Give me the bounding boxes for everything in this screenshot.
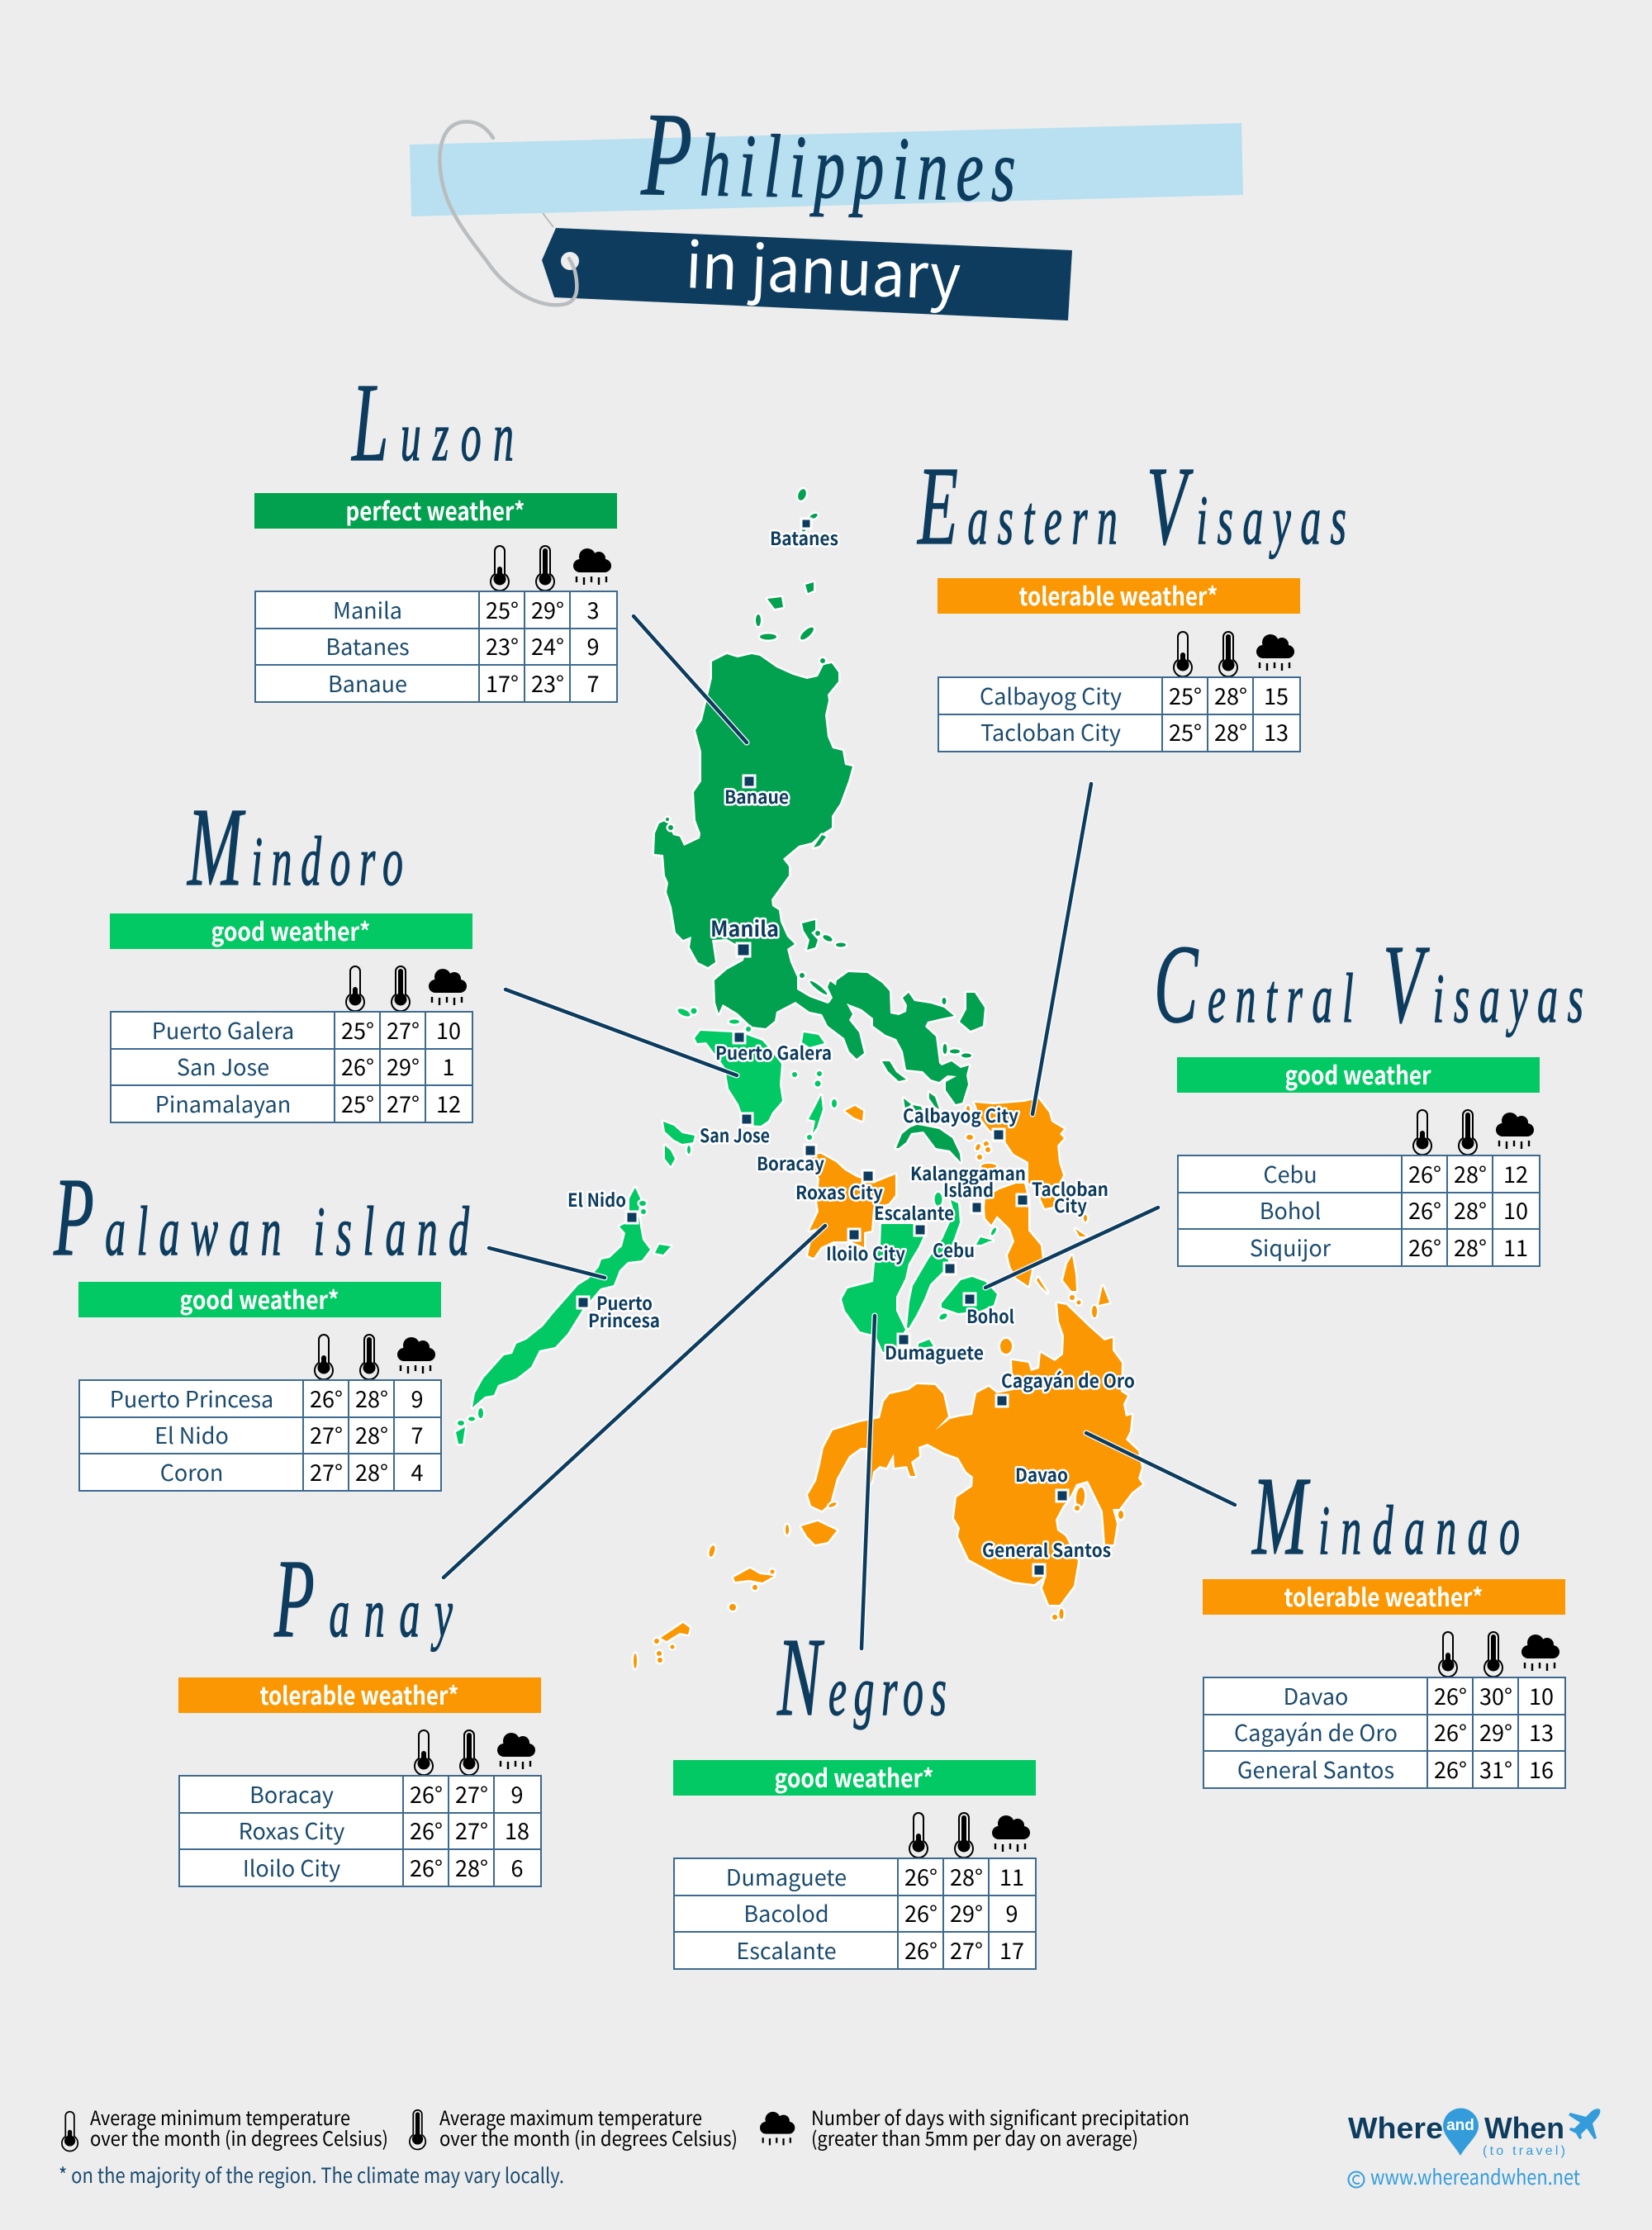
- weather table: 26°: [410, 1777, 443, 1810]
- map city labels: Davao: [1015, 1461, 1068, 1487]
- panel: Mindanao: [1203, 1455, 1565, 1788]
- weather bar: good weather*: [211, 912, 370, 948]
- weather table: Puerto Princesa: [110, 1382, 273, 1414]
- weather table: 28°: [950, 1860, 983, 1892]
- weather table: 25°: [1169, 679, 1202, 711]
- weather table: Coron: [160, 1455, 223, 1487]
- legend text: precipitation: Number of days with significant precipitation: [811, 2102, 1189, 2131]
- heading: Luzon: L uzon: [351, 362, 514, 485]
- weather table: Iloilo City: [243, 1851, 340, 1883]
- weather table: Dumaguete: [726, 1860, 847, 1892]
- map city labels: Iloilo City: [826, 1240, 905, 1266]
- weather bar: tolerable weather*: [259, 1676, 459, 1712]
- weather table: 27°: [455, 1814, 488, 1846]
- leader line: Mindanao: [1086, 1433, 1235, 1505]
- weather table: 23°: [531, 667, 564, 699]
- map city labels: Kalanggaman: [910, 1160, 1026, 1186]
- map city labels: Puerto: [596, 1289, 653, 1316]
- map city labels: Manila: [710, 913, 779, 943]
- map city labels: Puerto Galera: [715, 1039, 832, 1065]
- weather table: 26°: [341, 1050, 374, 1082]
- leader line: Eastern Visayas: [1032, 784, 1091, 1114]
- logo word: When: When: [1484, 2111, 1564, 2145]
- legend text: minimum temperature: Average minimum temperature: [90, 2102, 350, 2131]
- map city labels: Boracay: [757, 1150, 824, 1176]
- weather table: 26°: [1408, 1231, 1441, 1263]
- region: Eastern Visayas: [966, 1098, 1064, 1293]
- panel: Panay: [178, 1538, 541, 1886]
- weather table: 28°: [355, 1382, 388, 1414]
- weather table: Banaue: [328, 667, 407, 699]
- weather table: 26°: [1434, 1679, 1467, 1711]
- weather table: 11: [1503, 1231, 1528, 1263]
- weather bar: good weather: [1285, 1056, 1431, 1092]
- weather table: [111, 1012, 472, 1122]
- weather table: 26°: [410, 1851, 443, 1883]
- region: Panay: [808, 1106, 895, 1258]
- weather table: 27°: [310, 1418, 343, 1450]
- map city labels: Batanes: [770, 524, 838, 551]
- legend text: precipitation: (greater than 5mm per day on average): [811, 2123, 1138, 2152]
- weather table: Tacloban City: [980, 715, 1121, 747]
- weather table: 10: [436, 1013, 461, 1046]
- weather table: 27°: [950, 1933, 983, 1966]
- weather table: 29°: [1479, 1715, 1512, 1748]
- weather table: 25°: [341, 1013, 374, 1046]
- map city labels: Calbayog City: [903, 1102, 1018, 1128]
- weather table: [938, 677, 1300, 752]
- weather table: Roxas City: [239, 1814, 344, 1846]
- leader line: Luzon: [634, 616, 747, 743]
- column icons: [491, 546, 611, 591]
- weather table: 3: [586, 593, 600, 625]
- logo word: and: and: [1446, 2117, 1474, 2134]
- weather table: General Santos: [1237, 1753, 1394, 1785]
- icon: minimum temperature: [62, 2112, 78, 2151]
- legend: [62, 2102, 1189, 2152]
- weather table: Cagayán de Oro: [1234, 1715, 1398, 1748]
- weather table: 25°: [486, 593, 519, 625]
- weather table: El Nido: [154, 1418, 229, 1450]
- weather bar: good weather*: [775, 1758, 933, 1795]
- logo tagline: (to travel): [1483, 2144, 1565, 2158]
- weather bar: good weather*: [180, 1280, 339, 1317]
- weather table: San Jose: [177, 1050, 269, 1082]
- weather table: 28°: [1454, 1231, 1487, 1263]
- map city labels: Cagayán de Oro: [1001, 1367, 1135, 1393]
- weather bar: [1177, 1056, 1540, 1093]
- panel: Luzon: [254, 362, 617, 702]
- weather table: 30°: [1479, 1679, 1512, 1711]
- weather table: 12: [1503, 1157, 1528, 1189]
- weather table: Bacolod: [743, 1896, 829, 1929]
- map city labels: Princesa: [588, 1307, 660, 1333]
- string tail: [543, 213, 553, 227]
- leader line: Central Visayas: [985, 1208, 1158, 1288]
- weather table: 28°: [1214, 679, 1247, 711]
- weather table: 7: [411, 1418, 423, 1450]
- weather bar: [110, 912, 472, 949]
- map of the Philippines: [456, 488, 1142, 1668]
- weather table: 25°: [341, 1087, 374, 1119]
- weather table: Calbayog City: [980, 679, 1122, 711]
- icon: precipitation: [760, 2112, 795, 2145]
- weather table: 26°: [904, 1860, 938, 1892]
- map city labels: El Nido: [567, 1186, 626, 1212]
- tag hole: [561, 252, 579, 270]
- panel: Eastern Visayas: [917, 445, 1346, 752]
- weather table: 28°: [1214, 715, 1247, 747]
- icon: plane: [1569, 2109, 1600, 2139]
- luggage tag: [542, 228, 1072, 320]
- weather table: 9: [1006, 1896, 1018, 1929]
- heading: Mindoro: Mindoro: [187, 786, 403, 909]
- icon: copyright: [1348, 2172, 1365, 2187]
- weather table: 28°: [355, 1418, 388, 1450]
- title banner: [410, 123, 1243, 216]
- weather table: 18: [505, 1814, 529, 1846]
- subtitle: in january: [684, 215, 963, 318]
- region: Central Visayas: [907, 1193, 997, 1328]
- weather table: 26°: [310, 1382, 343, 1414]
- weather table: Batanes: [325, 629, 410, 662]
- weather table: 6: [510, 1851, 524, 1883]
- weather table: 17°: [486, 667, 519, 699]
- region: Mindoro light green: [676, 1007, 837, 1140]
- weather bar: [1203, 1578, 1565, 1615]
- weather bar: [938, 576, 1300, 614]
- map city labels: Tacloban: [1032, 1175, 1108, 1202]
- title block: [410, 88, 1243, 320]
- weather bar: tolerable weather*: [1019, 576, 1218, 613]
- weather table: 27°: [387, 1013, 420, 1046]
- weather table: 4: [411, 1455, 423, 1487]
- weather table: 31°: [1479, 1753, 1512, 1785]
- weather table: 27°: [455, 1777, 488, 1810]
- weather table: 10: [1529, 1679, 1554, 1711]
- leader line: Palawan: [489, 1248, 605, 1278]
- weather table: 28°: [1454, 1157, 1487, 1189]
- heading: Mindanao: M indanao: [1251, 1455, 1520, 1578]
- panel: Negros: [673, 1616, 1036, 1969]
- weather table: 26°: [904, 1896, 938, 1929]
- panel: Mindoro: [110, 786, 472, 1122]
- weather table: 1: [443, 1050, 454, 1082]
- weather bar: [178, 1676, 541, 1713]
- legend text: minimum temperature: over the month (in degrees Celsius): [90, 2123, 388, 2152]
- weather table: [255, 591, 617, 702]
- map city labels: San Jose: [700, 1122, 770, 1148]
- weather table: 9: [586, 629, 600, 662]
- weather table: Pinamalayan: [155, 1087, 291, 1119]
- weather table: 7: [586, 667, 600, 699]
- weather table: [1203, 1677, 1565, 1788]
- region: Luzon dark green: [654, 488, 985, 1162]
- luggage tag string: [439, 121, 577, 305]
- weather table: 9: [510, 1777, 524, 1810]
- weather table: 25°: [1169, 715, 1202, 747]
- legend text: maximum temperature: over the month (in degrees Celsius): [439, 2123, 738, 2152]
- weather bar: [78, 1280, 441, 1317]
- icon: maximum temperature: [410, 2110, 425, 2149]
- map city markers: [577, 519, 1068, 1576]
- panel: Central Visayas: [1154, 923, 1583, 1266]
- logo word: Where: Where: [1348, 2111, 1443, 2145]
- weather bar: tolerable weather*: [1284, 1578, 1483, 1614]
- map city labels: City: [1054, 1192, 1087, 1218]
- weather bar: [254, 491, 617, 529]
- main title: Philippines: [640, 88, 1017, 226]
- legend text: maximum temperature: Average maximum temperature: [439, 2102, 702, 2131]
- column icons: [1413, 1110, 1534, 1155]
- map city labels: Banaue: [724, 783, 789, 809]
- weather table: 28°: [455, 1851, 488, 1883]
- weather table: 17: [999, 1933, 1024, 1966]
- weather table: [674, 1858, 1036, 1969]
- panel: Palawan island: [53, 1156, 470, 1491]
- heading: Central Visayas: Central Visayas: [1154, 923, 1583, 1046]
- weather table: 11: [999, 1860, 1024, 1892]
- heading: Eastern Visayas: Eastern Visayas: [917, 445, 1346, 568]
- weather table: 29°: [531, 593, 564, 625]
- weather table: 26°: [904, 1933, 938, 1966]
- weather table: 29°: [950, 1896, 983, 1929]
- column icons: [415, 1730, 535, 1775]
- weather table: 26°: [410, 1814, 443, 1846]
- map city labels: [567, 524, 1135, 1563]
- weather table: 27°: [310, 1455, 343, 1487]
- weather table: 15: [1264, 679, 1289, 711]
- weather table: 28°: [355, 1455, 388, 1487]
- logo: [1348, 2108, 1600, 2191]
- weather table: [1178, 1155, 1540, 1266]
- weather table: Siquijor: [1250, 1231, 1332, 1263]
- weather table: 26°: [1408, 1157, 1441, 1189]
- column icons: [346, 966, 467, 1011]
- weather table: 23°: [486, 629, 519, 662]
- weather table: 28°: [1454, 1193, 1487, 1226]
- heading: Negros: Negros: [776, 1616, 947, 1739]
- weather table: 13: [1264, 715, 1289, 747]
- weather table: Puerto Galera: [152, 1013, 294, 1046]
- leader line: Panay: [444, 1226, 825, 1578]
- weather table: 27°: [387, 1087, 420, 1119]
- map city labels: Island: [943, 1176, 994, 1203]
- column icons: [1439, 1632, 1559, 1677]
- weather table: Boracay: [249, 1777, 334, 1810]
- column icons: [315, 1335, 435, 1379]
- weather table: 26°: [1434, 1715, 1467, 1748]
- weather table: Cebu: [1263, 1157, 1317, 1189]
- weather table: 24°: [531, 629, 564, 662]
- weather table: 26°: [1434, 1753, 1467, 1785]
- map city labels: Dumaguete: [885, 1339, 984, 1365]
- heading: Panay: P anay: [273, 1538, 453, 1661]
- weather table: [179, 1776, 541, 1886]
- weather bar: [673, 1758, 1036, 1796]
- region: Palawan: [456, 1122, 695, 1444]
- column icons: [909, 1813, 1030, 1858]
- weather table: Bohol: [1260, 1193, 1321, 1226]
- column icons: [1174, 632, 1294, 676]
- weather table: Escalante: [736, 1933, 837, 1966]
- weather table: 16: [1529, 1753, 1554, 1785]
- map city labels: Escalante: [874, 1199, 954, 1226]
- heading: Palawan island: P alawan island: [53, 1156, 470, 1279]
- icon: location pin: [1443, 2108, 1479, 2156]
- weather table: 29°: [387, 1050, 420, 1082]
- website: www.whereandwhen.net: [1370, 2161, 1580, 2191]
- footnote: * on the majority of the region. The climate may vary locally.: [59, 2160, 564, 2190]
- weather table: Manila: [333, 593, 402, 625]
- weather table: 13: [1529, 1715, 1554, 1748]
- region: Mindanao: [634, 1215, 1142, 1668]
- weather table: 10: [1503, 1193, 1528, 1226]
- leader line: Mindoro: [506, 989, 737, 1075]
- map city labels: Roxas City: [795, 1179, 883, 1205]
- weather table: 9: [411, 1382, 423, 1414]
- weather table: 12: [436, 1087, 461, 1119]
- weather bar: perfect weather*: [345, 491, 525, 528]
- weather table: [79, 1380, 441, 1491]
- weather table: Davao: [1284, 1679, 1348, 1711]
- map city labels: Cebu: [933, 1236, 975, 1263]
- weather table: 26°: [1408, 1193, 1441, 1226]
- map city labels: General Santos: [982, 1536, 1111, 1563]
- leader line: Negros: [862, 1316, 875, 1649]
- region: Negros: [842, 1224, 933, 1352]
- map city labels: Bohol: [966, 1302, 1014, 1329]
